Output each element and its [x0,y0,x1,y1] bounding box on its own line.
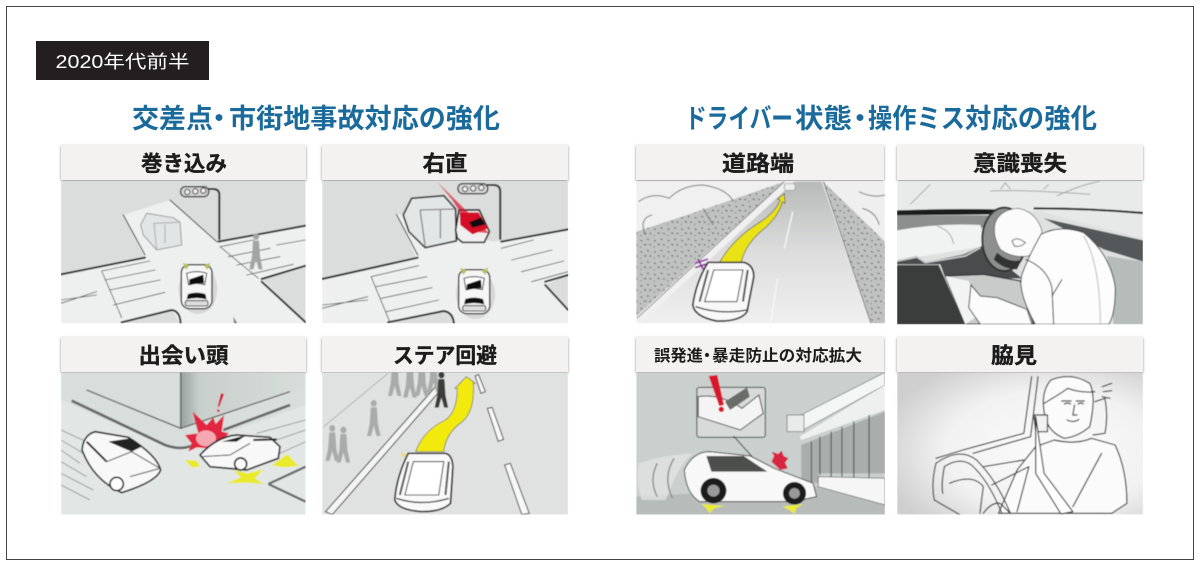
heading: right group [685,104,1097,134]
panel: 右直: 右直 [422,152,468,176]
heading: left group: 市街地事故対応の強化 [229,104,500,134]
heading: right group: 状態 [795,104,852,134]
period tag: 2020年代前半 [36,41,209,80]
panel: 出会い頭: 出会い頭 [138,344,229,368]
panel: ステア回避 [322,336,568,515]
panel: ステア回避: ステア回避 [393,344,497,368]
panel: 意識喪失 [897,144,1143,324]
panel: 巻き込み [61,144,306,323]
panel: 道路端 [636,144,885,323]
heading: right group: 対応の強化 [965,104,1097,134]
panel: 誤発進・暴走防止の対応拡大: 誤発進 [654,347,703,365]
panel: 出会い頭 [61,336,306,515]
panel: 脇見: 脇見 [991,344,1037,368]
panel: 誤発進・暴走防止の対応拡大: ・ [699,348,715,365]
panel: 脇見 [897,336,1143,515]
heading: right group: 操作ミス [868,104,965,134]
heading: left group: 交差点 [132,104,213,134]
panel: 誤発進・暴走防止の対応拡大: 暴走防止の対応拡大 [712,347,862,365]
period tag: 2020年代前半: 2020年代前半 [56,52,190,72]
panel: 誤発進・暴走防止の対応拡大 [636,336,885,515]
heading: right group: ・ [846,104,874,134]
heading: right group: ドライバー [685,104,793,134]
panel: 意識喪失: 意識喪失 [973,152,1068,176]
panel: 右直 [322,144,568,323]
panel: 道路端: 道路端 [722,152,794,176]
panel: 巻き込み: 巻き込み [141,152,227,176]
heading: left group: ・ [206,104,232,134]
